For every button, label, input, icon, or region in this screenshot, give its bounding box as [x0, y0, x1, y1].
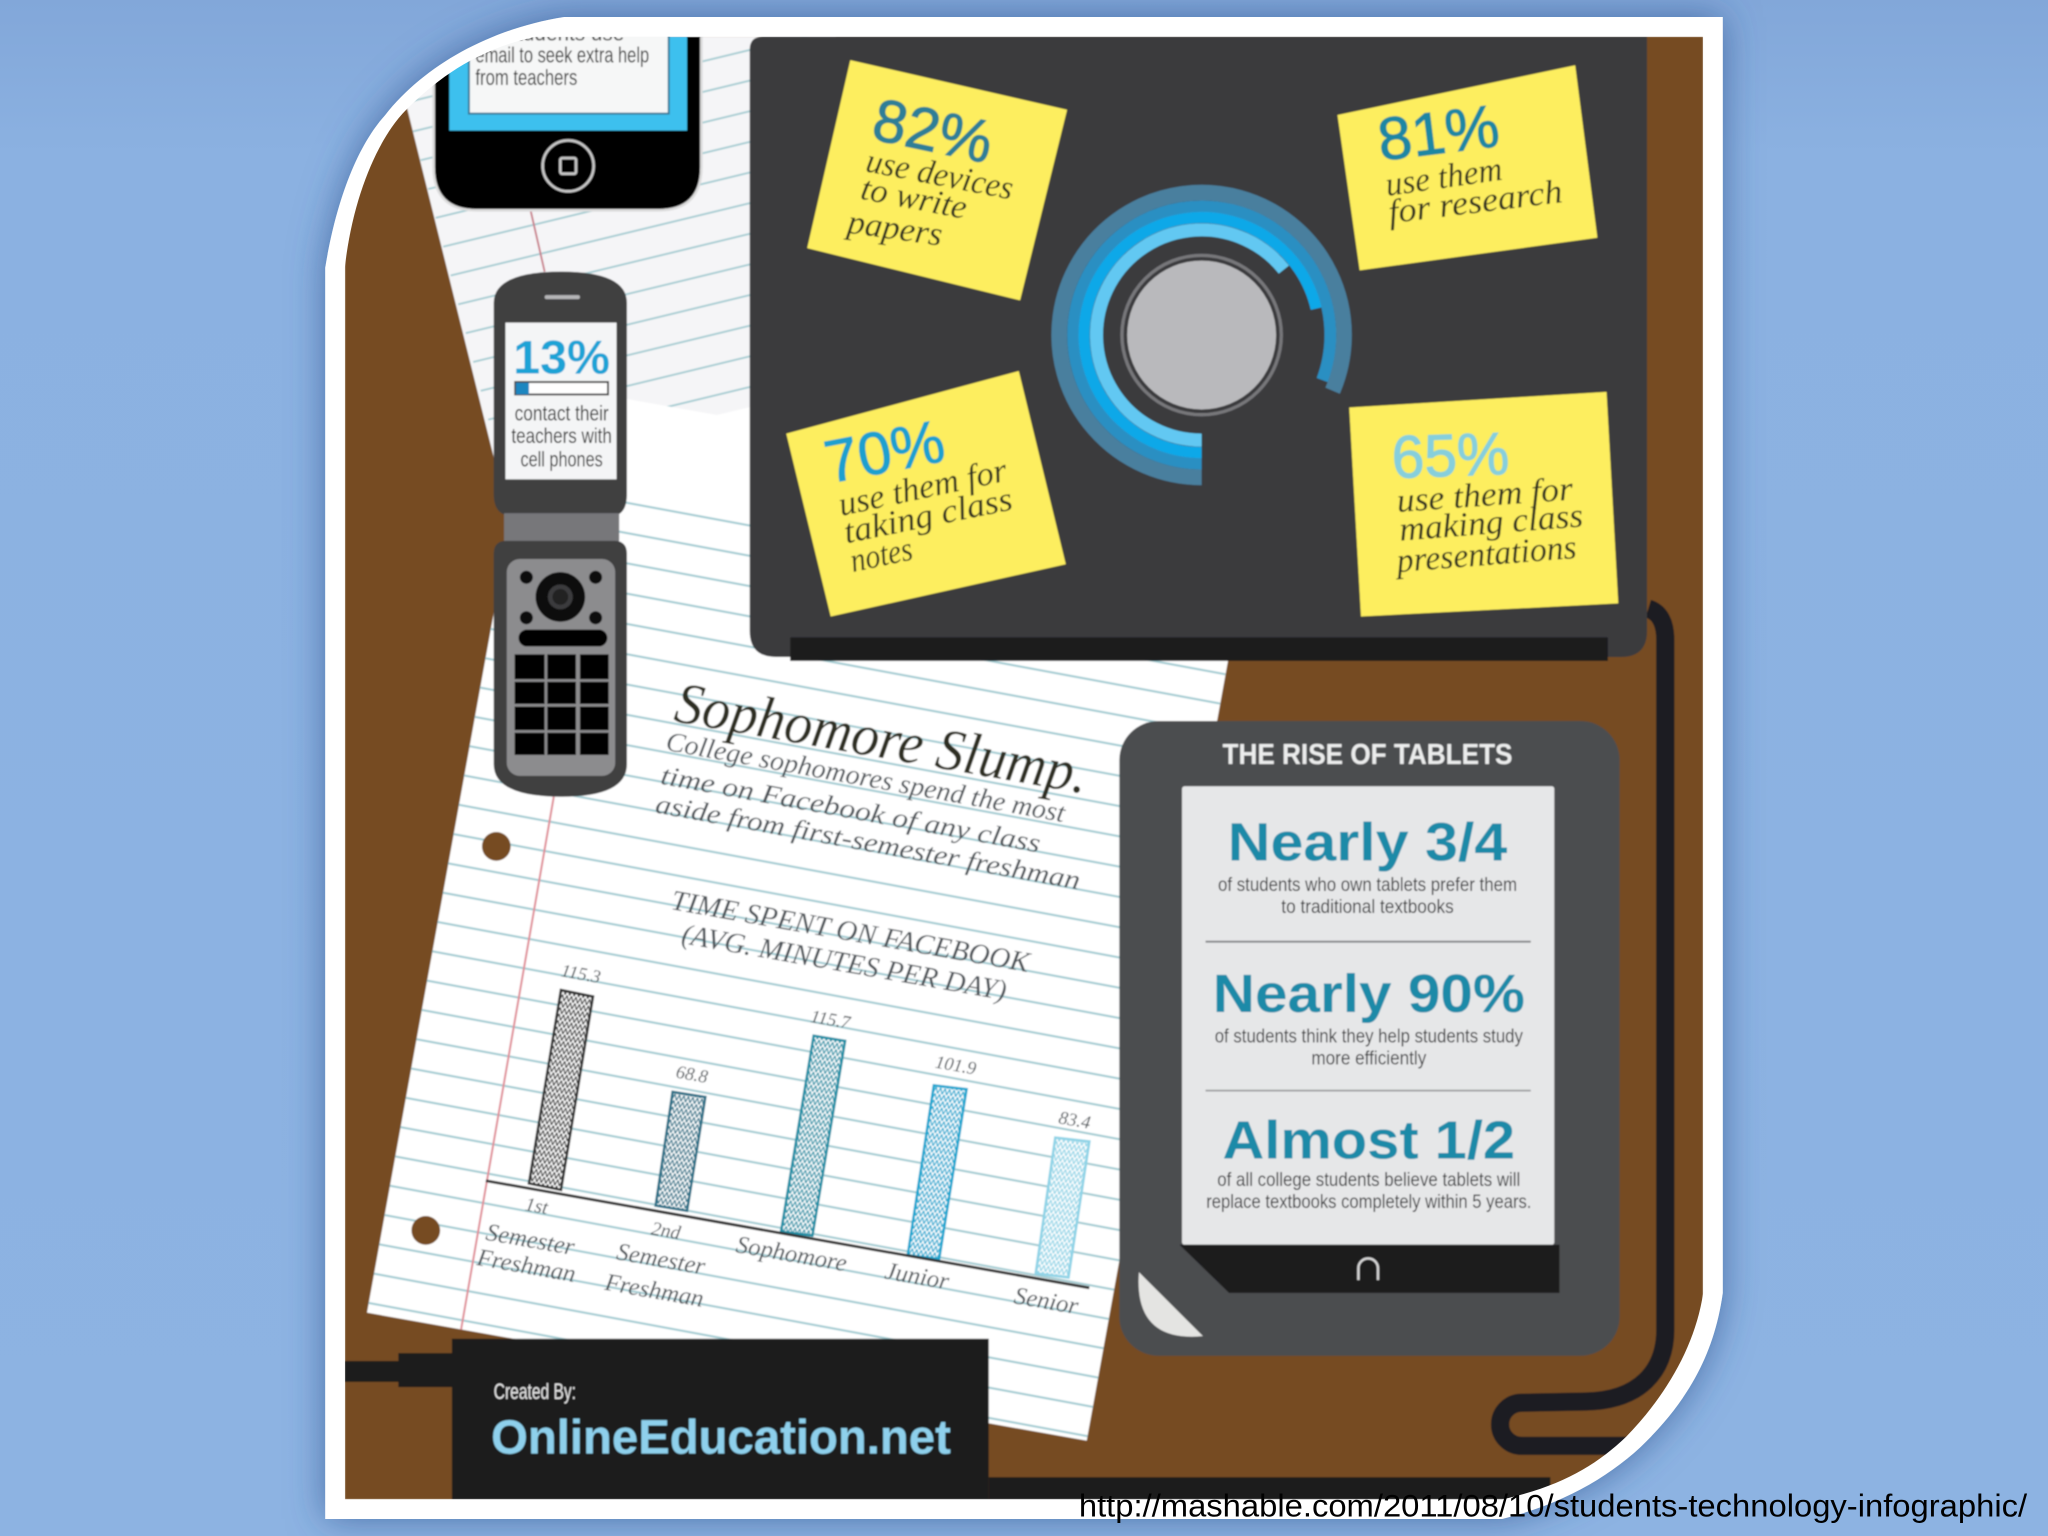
- text: sophomore description: aside from first-semester freshman: [653, 789, 1083, 895]
- sticky note: 65%: making class: [1398, 497, 1584, 549]
- framed artwork: [345, 20, 1703, 1499]
- sticky note: 81%: [1337, 65, 1597, 270]
- stat: nearly 3/4: to traditional textbooks: [1281, 896, 1454, 918]
- tablet corner highlight: [1139, 1272, 1203, 1337]
- category labels: [474, 1194, 1081, 1320]
- progress bar: 13 percent: [515, 382, 608, 394]
- category labels: Semester: [614, 1238, 708, 1281]
- text: sophomore description: [653, 726, 1083, 895]
- phone screen: contact their: [515, 401, 609, 426]
- category labels: 2nd: [649, 1219, 682, 1244]
- sticky note: 81%: for research: [1386, 173, 1564, 231]
- smartphone: email to seek extra help: [475, 43, 649, 68]
- sticky note: 70%: [786, 371, 1066, 616]
- smartphone: from teachers: [475, 65, 577, 90]
- phone screen: cell phones: [520, 446, 603, 471]
- value labels: 115.3: [560, 960, 602, 987]
- sticky note: 70%: 70%: [819, 407, 950, 496]
- sticky note: 81%: 81%: [1374, 92, 1503, 174]
- text: sophomore description: time on Facebook of any class: [659, 760, 1043, 858]
- category labels: Freshman: [602, 1269, 706, 1313]
- smartphone: [435, 20, 700, 209]
- sticky note: 70%: notes: [847, 531, 916, 580]
- tablet bottom bar: [1179, 1245, 1560, 1293]
- value labels: 101.9: [934, 1052, 978, 1079]
- value labels: 68.8: [675, 1062, 709, 1087]
- value labels: [560, 960, 1092, 1133]
- desk surface: [345, 37, 1703, 1499]
- flip phone: [494, 272, 627, 797]
- bar: junior: [908, 1085, 967, 1259]
- category labels: Junior: [883, 1258, 951, 1296]
- stat: almost 1/2: of all college students believe tablets will: [1217, 1169, 1520, 1191]
- phone screen: teachers with: [511, 423, 612, 448]
- stat: nearly 3/4: Nearly 3/4: [1228, 814, 1508, 873]
- stat: almost 1/2: [1206, 1112, 1531, 1213]
- white rounded frame: [325, 17, 1723, 1519]
- smartphone: students use: [507, 20, 624, 45]
- brand name: OnlineEducation.net: [491, 1411, 951, 1465]
- credit box: [452, 1339, 989, 1499]
- charging cable: [1500, 609, 1698, 1446]
- upper notebook paper: [406, 36, 762, 458]
- bar chart: time on Facebook: [474, 960, 1092, 1320]
- category labels: Sophomore: [734, 1231, 849, 1277]
- chart title: (AVG. MINUTES PER DAY): [679, 918, 1009, 1007]
- source URL: http://mashable.com/2011/08/10/students-technology-infographic/: [1079, 1488, 2027, 1523]
- sticky note: 82%: papers: [843, 203, 945, 254]
- sticky note: 65%: 65%: [1390, 420, 1510, 491]
- stat: nearly 90%: Nearly 90%: [1213, 965, 1525, 1024]
- bar: senior: [1036, 1138, 1089, 1277]
- bar: sophomore: [781, 1036, 845, 1236]
- sticky note: 82%: [807, 60, 1067, 300]
- text: sophomore description: College sophomores spend the most: [664, 726, 1069, 828]
- tablet: [1119, 721, 1620, 1356]
- cable into credit box: [345, 1353, 1550, 1499]
- icon: home button: [543, 140, 594, 191]
- created by label: Created By:: [494, 1379, 576, 1404]
- stat: nearly 90%: more efficiently: [1311, 1047, 1426, 1069]
- sticky note: 70%: use them for: [835, 452, 1011, 524]
- sticky note: 70%: taking class: [841, 481, 1016, 551]
- tablet heading: THE RISE OF TABLETS: [1223, 739, 1512, 771]
- sticky note: 82%: to write: [858, 170, 970, 227]
- tablet screen: [1182, 786, 1554, 1245]
- lower notebook paper: [367, 383, 1255, 1441]
- stat: almost 1/2: Almost 1/2: [1223, 1112, 1515, 1171]
- heading: Sophomore Slump: Sophomore Slump.: [670, 670, 1093, 806]
- value labels: 83.4: [1057, 1107, 1092, 1133]
- phone screen: 13%: [513, 331, 610, 384]
- sticky note: 81%: use them: [1383, 151, 1505, 204]
- sticky note: 82%: use devices: [863, 143, 1016, 207]
- category labels: 1st: [523, 1194, 550, 1219]
- category labels: Semester: [484, 1219, 577, 1261]
- laptop: [750, 37, 1647, 661]
- icon: nook arch: [1358, 1258, 1378, 1280]
- category labels: Senior: [1012, 1282, 1081, 1320]
- chart title: TIME SPENT ON FACEBOOK: [669, 884, 1034, 979]
- phone screen: [505, 323, 616, 479]
- stat: almost 1/2: replace textbooks completely within 5 years.: [1206, 1191, 1531, 1213]
- stat: nearly 90%: [1213, 965, 1525, 1069]
- category labels: Freshman: [474, 1244, 578, 1288]
- keypad: [507, 559, 615, 776]
- stat: nearly 90%: of students think they help students study: [1215, 1025, 1523, 1047]
- axis line: [486, 1181, 1089, 1288]
- bar: 2nd semester freshman: [656, 1092, 705, 1211]
- donut chart: [1059, 193, 1344, 477]
- sticky note: 65%: use them for: [1396, 471, 1575, 520]
- sticky note: 65%: presentations: [1393, 529, 1578, 580]
- value labels: 115.7: [809, 1006, 853, 1033]
- sticky note: 82%: 82%: [867, 86, 999, 176]
- stat: nearly 3/4: of students who own tablets prefer them: [1218, 874, 1517, 896]
- sticky note: 65%: [1349, 392, 1618, 616]
- stat: nearly 3/4: [1218, 814, 1517, 918]
- bar: 1st semester freshman: [529, 990, 593, 1190]
